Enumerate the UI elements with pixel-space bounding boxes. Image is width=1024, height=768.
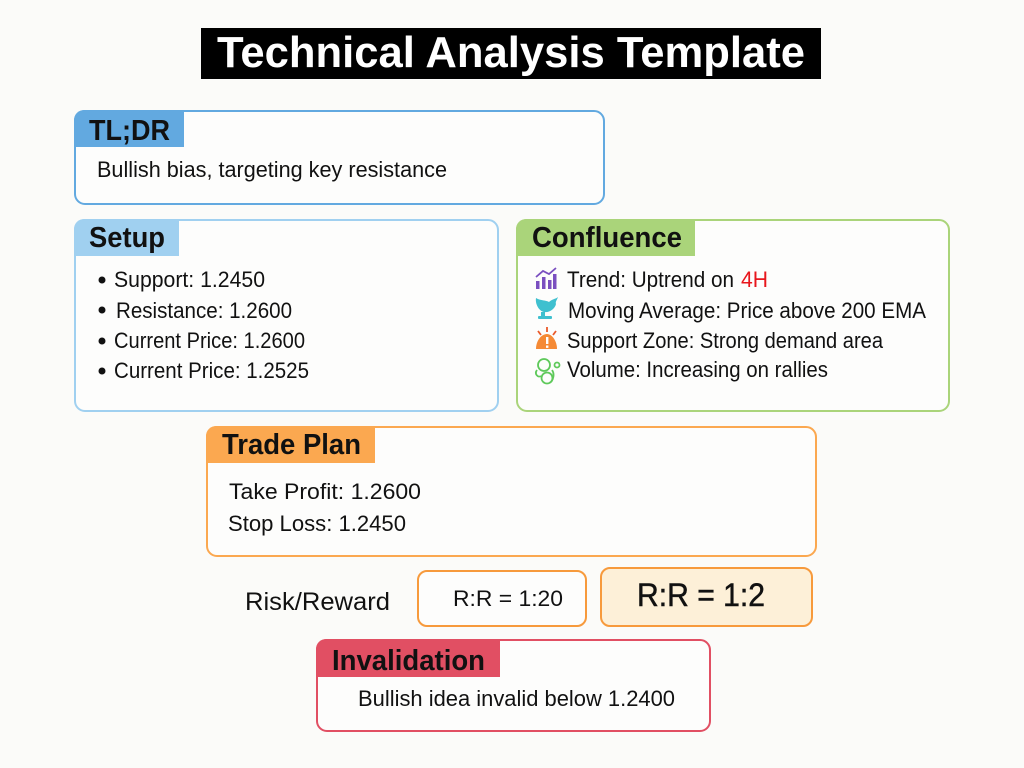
list: setup levels: Resistance: 1.2600 — [116, 298, 292, 323]
heading: TL;DR — [74, 110, 184, 147]
text: take profit: Take Profit: 1.2600 — [229, 479, 421, 504]
heading: Invalidation: Invalidation — [332, 645, 485, 677]
list: setup levels — [98, 267, 309, 383]
list: setup levels: Current Price: 1.2600 — [114, 328, 305, 353]
text: TL;DR summary: Bullish bias, targeting key resistance — [97, 157, 447, 182]
text: trend: Trend: Uptrend on — [567, 267, 734, 292]
callout: R:R 1:2: R:R = 1:2 — [637, 577, 765, 613]
heading: Setup — [74, 219, 179, 256]
heading: Confluence: Confluence — [532, 222, 682, 254]
text: stop loss: Stop Loss: 1.2450 — [228, 511, 406, 536]
callout: R:R 1:2 — [601, 568, 812, 626]
icon: volume — [536, 359, 560, 384]
panel: Trade Plan — [206, 426, 816, 556]
title: Technical Analysis Template — [217, 28, 805, 77]
list: setup levels: Current Price: 1.2525 — [114, 358, 309, 383]
list: setup levels: Support: 1.2450 — [114, 267, 265, 292]
text: moving average: Moving Average: Price above 200 EMA — [568, 298, 926, 323]
text: 4H highlight: 4H — [741, 267, 768, 292]
text: support zone: Support Zone: Strong demand area — [567, 328, 884, 353]
panel: Setup — [74, 219, 498, 411]
icon: moving average — [536, 297, 558, 319]
heading: Setup: Setup — [89, 222, 165, 254]
icon: support zone alert — [536, 327, 557, 349]
callout: R:R 1:20 — [418, 571, 586, 626]
panel: Confluence — [516, 219, 949, 411]
panel: Invalidation — [316, 639, 710, 731]
text: invalidation level: Bullish idea invalid below 1.2400 — [358, 686, 675, 711]
text: volume: Volume: Increasing on rallies — [567, 357, 828, 382]
icon: trend chart — [536, 268, 556, 289]
heading: Trade Plan: Trade Plan — [222, 429, 361, 461]
callout: R:R 1:20: R:R = 1:20 — [453, 586, 563, 611]
label: Risk/Reward: Risk/Reward — [245, 588, 390, 616]
panel: TL;DR — [74, 110, 604, 204]
heading: TL;DR: TL;DR — [89, 115, 170, 147]
